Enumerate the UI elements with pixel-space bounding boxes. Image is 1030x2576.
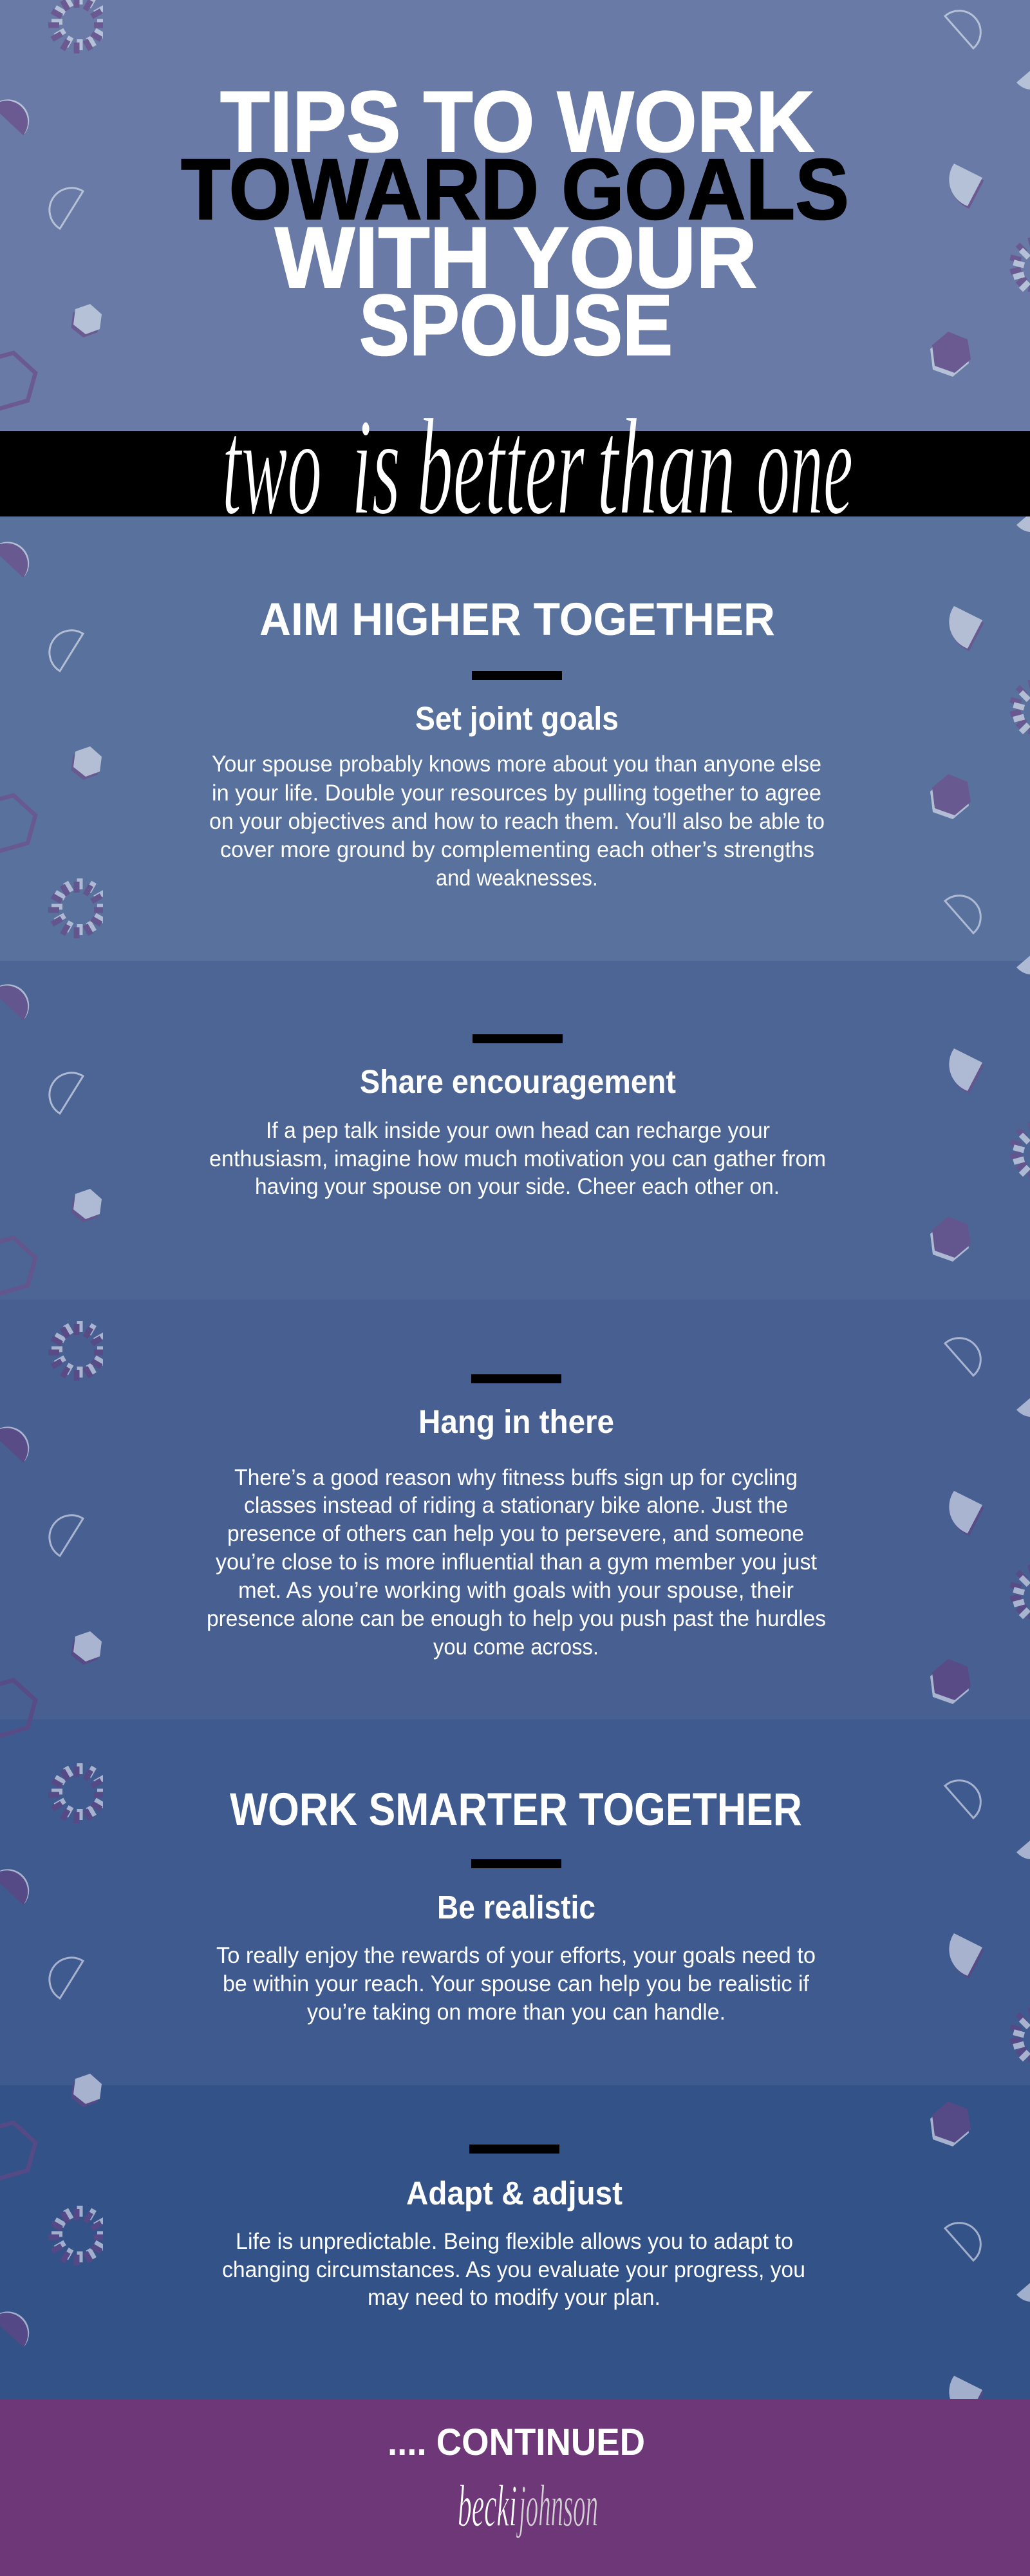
body text: hang in there: met. As you’re working with goals with your spouse, their	[238, 1578, 794, 1603]
section background: work smarter	[0, 1719, 1030, 2085]
banner script tagline: is	[351, 390, 400, 544]
body text: share encouragement: enthusiasm, imagine how much motivation you can gather from	[209, 1146, 826, 1171]
subheading: adapt and adjust: Adapt & adjust	[406, 2175, 623, 2211]
body text: adapt and adjust: changing circumstances. As you evaluate your progress, you	[222, 2257, 805, 2282]
body text: adapt and adjust: may need to modify your plan.	[368, 2285, 660, 2310]
title: TOWARD GOALS	[181, 142, 849, 238]
body text: hang in there: you come across.	[433, 1634, 599, 1660]
body text: set joint goals: Your spouse probably knows more about you than anyone else	[212, 752, 821, 777]
subheading: set joint goals: Set joint goals	[415, 700, 619, 737]
decorative shapes: band 6	[0, 2206, 1030, 2576]
body text: set joint goals: cover more ground by complementing each other’s strengths	[220, 837, 814, 862]
body text: hang in there: you’re close to is more influential than a gym member you just	[216, 1549, 817, 1575]
text: one	[756, 390, 853, 544]
body text: hang in there: presence of others can help you to persevere, and someone	[227, 1521, 804, 1546]
body text: be realistic: be within your reach. Your spouse can help you be realistic if	[223, 1971, 809, 1996]
decorative shapes: band 3	[0, 878, 1030, 1297]
body text: adapt and adjust: Life is unpredictable. Being flexible allows you to adapt to	[236, 2229, 793, 2254]
decorative shapes: band 5	[0, 1763, 1030, 2182]
footer text: continued: .... CONTINUED	[388, 2421, 645, 2463]
title: TIPS TO WORK	[220, 74, 814, 170]
divider bar	[471, 1859, 561, 1868]
decorative shapes: band 1	[0, 0, 1030, 412]
body text: share encouragement	[209, 1118, 826, 1199]
section background: adapt and adjust	[0, 2085, 1030, 2399]
divider bar	[472, 671, 562, 680]
title: SPOUSE	[359, 278, 673, 374]
footer panel	[0, 2399, 1030, 2576]
body text: be realistic	[216, 1943, 816, 2025]
title: WITH YOUR	[275, 210, 757, 306]
body text: share encouragement: If a pep talk inside your own head can recharge your	[266, 1118, 770, 1143]
banner script tagline: two	[222, 390, 322, 544]
title	[181, 74, 849, 374]
divider bar	[473, 1034, 563, 1043]
subheading: hang in there: Hang in there	[418, 1403, 614, 1440]
signature: becki johnson: becki	[458, 2473, 517, 2539]
section background: share encouragement	[0, 961, 1030, 1300]
body text: share encouragement: having your spouse on your side. Cheer each other on.	[255, 1174, 780, 1199]
body text: be realistic: you’re taking on more than you can handle.	[307, 2000, 726, 2025]
section heading: aim higher together: AIM HIGHER TOGETHER	[259, 594, 775, 645]
decorative shapes: band 2	[0, 436, 1030, 855]
divider bar	[469, 2145, 559, 2154]
body text: set joint goals: and weaknesses.	[436, 866, 598, 891]
banner script tagline: better	[417, 390, 585, 544]
body text: set joint goals: on your objectives and how to reach them. You’ll also be able to	[209, 809, 825, 834]
body text: set joint goals: in your life. Double your resources by pulling together to agree	[212, 781, 821, 806]
divider bar	[471, 1374, 561, 1383]
black banner	[0, 431, 1030, 516]
subheading: share encouragement: Share encouragement	[360, 1063, 676, 1100]
body text: hang in there: There’s a good reason why fitness buffs sign up for cycling	[234, 1465, 798, 1490]
body text: adapt and adjust	[222, 2229, 805, 2310]
header background	[0, 0, 1030, 516]
section heading: work smarter together: WORK SMARTER TOGETHER	[230, 1785, 802, 1835]
body text: hang in there: classes instead of riding a stationary bike alone. Just the	[244, 1493, 788, 1518]
decorative shapes: band 4	[0, 1321, 1030, 1739]
body text: hang in there	[207, 1465, 826, 1660]
section background: aim higher	[0, 516, 1030, 961]
body text: set joint goals	[209, 752, 825, 891]
subheading: be realistic: Be realistic	[437, 1889, 595, 1926]
section background: hang in there	[0, 1300, 1030, 1719]
text: johnson	[516, 2473, 598, 2539]
body text: be realistic: To really enjoy the rewards of your efforts, your goals need to	[216, 1943, 816, 1968]
body text: hang in there: presence alone can be enough to help you push past the hurdles	[207, 1606, 826, 1631]
banner script tagline: than	[597, 390, 736, 544]
banner script tagline	[222, 390, 853, 544]
